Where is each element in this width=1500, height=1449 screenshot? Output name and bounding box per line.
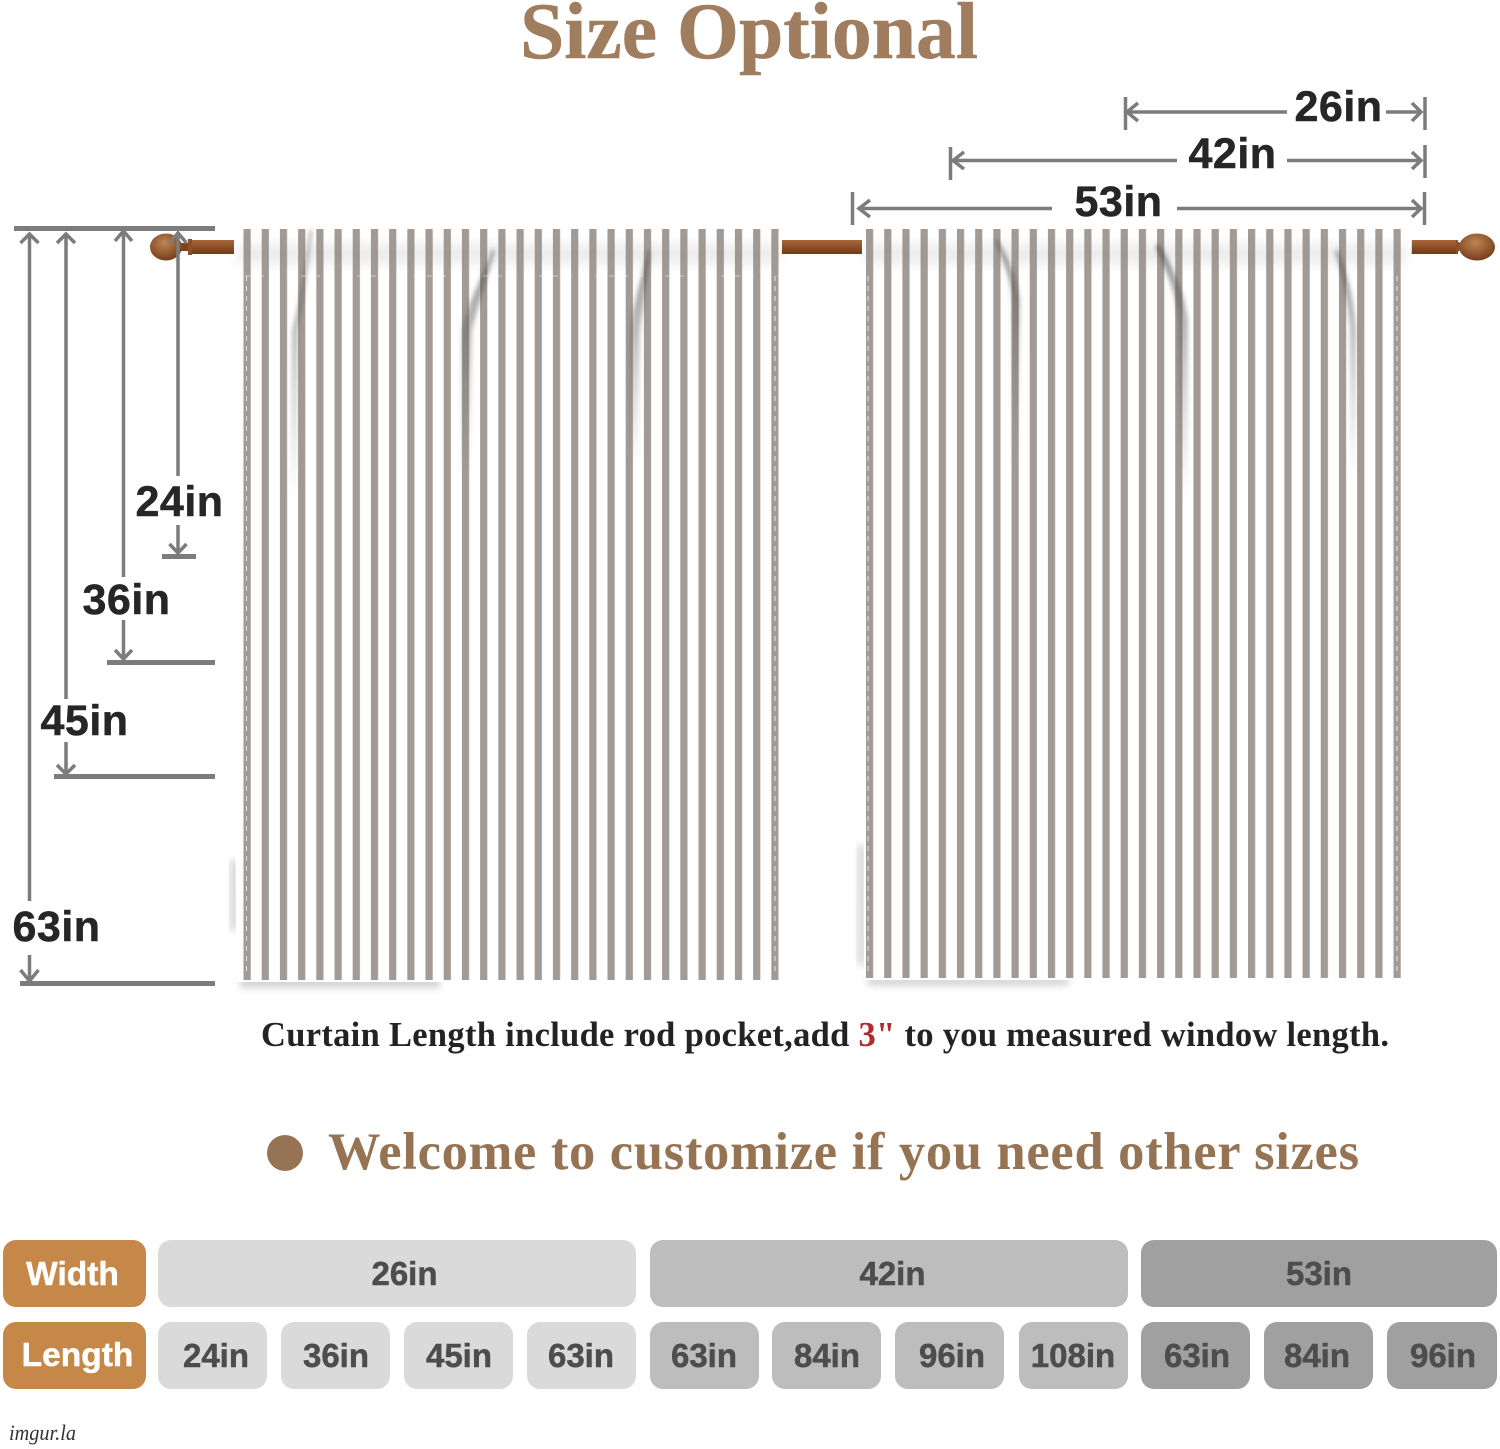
width dimension: 42in: 42in xyxy=(1188,130,1277,178)
length cell 63in: 63in xyxy=(671,1337,737,1374)
row header: length: Length xyxy=(22,1337,133,1374)
length cell 63in xyxy=(650,1322,759,1389)
length cell 84in: 84in xyxy=(794,1337,860,1374)
length dimension: 24in xyxy=(136,233,224,559)
note: rod pocket: Curtain Length include rod pocket,add 3" to you measured window length. xyxy=(261,1016,1389,1054)
width dimension: 53in: 53in xyxy=(1074,178,1163,226)
left curtain panel xyxy=(231,220,782,987)
length cell 45in xyxy=(404,1322,513,1389)
right curtain panel xyxy=(858,222,1412,985)
width dimension: 53in xyxy=(852,178,1424,226)
length cell 45in: 45in xyxy=(426,1337,492,1374)
row header: width: Width xyxy=(26,1256,119,1293)
length cell 24in: 24in xyxy=(183,1337,249,1374)
length dimension: 24in: 24in xyxy=(136,478,224,526)
length cell 63in: 63in xyxy=(1164,1337,1230,1374)
width cell 42in xyxy=(650,1240,1128,1307)
length cell 96in: 96in xyxy=(1410,1337,1476,1374)
row header: length xyxy=(3,1322,146,1389)
length cell 24in xyxy=(158,1322,267,1389)
width dimension: 42in xyxy=(950,130,1425,180)
curtain folds xyxy=(290,230,650,500)
length cell 63in: 63in xyxy=(548,1337,614,1374)
length cell 108in: 108in xyxy=(1031,1337,1115,1374)
length cell 63in xyxy=(527,1322,636,1389)
width dimension: 26in xyxy=(1126,83,1425,131)
length cell 63in xyxy=(1141,1322,1250,1389)
watermark: imgur.la xyxy=(9,1420,76,1445)
length cell 36in xyxy=(281,1322,390,1389)
width cell 42in: 42in xyxy=(859,1255,926,1292)
width dimension: 26in: 26in xyxy=(1294,83,1383,131)
length cell 84in xyxy=(1264,1322,1373,1389)
length dimension: 45in xyxy=(40,234,215,779)
top reference bar xyxy=(14,226,215,231)
row header: width xyxy=(3,1240,146,1307)
width cell 53in: 53in xyxy=(1286,1255,1352,1292)
length dimension: 63in: 63in xyxy=(12,903,101,951)
curtain rod xyxy=(150,234,1458,260)
length dimension: 63in xyxy=(12,234,215,986)
size table xyxy=(3,1240,1497,1389)
width cell 26in xyxy=(158,1240,636,1307)
icon: left finial xyxy=(150,234,182,260)
icon: bullet dot xyxy=(267,1135,303,1171)
length cell 96in xyxy=(1387,1322,1497,1389)
length dimension: 36in: 36in xyxy=(82,576,171,624)
width cell 26in: 26in xyxy=(371,1255,438,1292)
length cell 36in: 36in xyxy=(303,1337,369,1374)
length cell 108in xyxy=(1019,1322,1128,1389)
width cell 53in xyxy=(1141,1240,1497,1307)
length cell 84in xyxy=(772,1322,881,1389)
customize heading: Welcome to customize if you need other sizes xyxy=(328,1123,1359,1181)
length dimension: 45in: 45in xyxy=(40,697,129,745)
length cell 96in: 96in xyxy=(919,1337,985,1374)
curtain folds xyxy=(995,240,1356,500)
icon: right finial xyxy=(1456,234,1495,260)
length dimension: 36in xyxy=(82,231,215,665)
length cell 96in xyxy=(895,1322,1004,1389)
length cell 84in: 84in xyxy=(1284,1337,1350,1374)
